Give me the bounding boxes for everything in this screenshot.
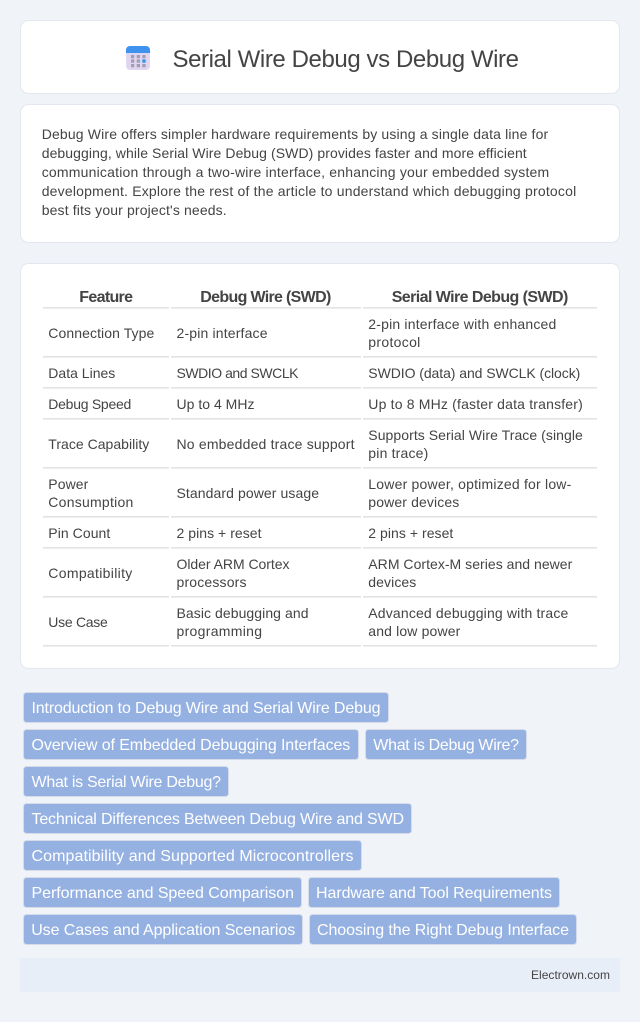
title card [20,20,620,94]
table header: Serial Wire Debug (SWD) [392,289,568,306]
intro text: best fits your project's needs. [42,202,227,218]
row: data lines [48,365,580,381]
row: connection type: Connection Type [48,325,155,341]
tag: introduction: Introduction to Debug Wire and Serial Wire Debug [32,700,380,717]
row: pin count: 2 pins + reset [176,525,262,541]
row: use case: Basic debugging and [176,605,308,621]
row: pin count: Pin Count [48,525,110,541]
tag: choosing [310,914,576,944]
tag: compatibility: Compatibility and Supported Microcontrollers [32,848,354,865]
row: data lines: Data Lines [48,365,115,381]
table header: Feature [79,289,133,306]
row: trace capability: No embedded trace support [176,436,355,452]
row: data lines: SWDIO (data) and SWCLK (clock) [368,365,580,381]
row: compatibility: devices [368,574,416,590]
comparison table card [20,264,620,668]
tag: hardware: Hardware and Tool Requirements [316,885,552,902]
row: power consumption: Standard power usage [176,485,319,501]
icon: calendar [126,46,150,70]
row: connection type: 2-pin interface with enhanced [368,316,556,332]
row: trace capability: Supports Serial Wire Trace (single [368,427,583,443]
tag: hardware [308,878,560,908]
tag: compatibility [24,840,362,870]
row: pin count: 2 pins + reset [368,525,453,541]
footer [20,958,620,992]
comparison table [43,289,597,647]
row: debug speed: Debug Speed [48,396,131,412]
table header: Debug Wire (SWD) [200,289,331,306]
row: trace capability [48,427,583,461]
intro card [20,104,620,242]
row: power consumption: Consumption [48,494,133,510]
row: power consumption: power devices [368,494,459,510]
row: use case: Use Case [48,614,108,630]
row: debug speed: Up to 4 MHz [176,396,254,412]
row: connection type: 2-pin interface [176,325,268,341]
tag: what is serial wire debug [24,766,228,796]
title: Serial Wire Debug vs Debug Wire [172,46,519,73]
row: connection type: protocol [368,334,420,350]
tag: introduction [24,692,388,722]
tag: choosing: Choosing the Right Debug Interface [317,922,569,939]
row: use case: and low power [368,623,461,639]
row: data lines: SWDIO and SWCLK [176,365,299,381]
tag: technical differences [24,804,412,834]
intro text: Debug Wire offers simpler hardware requirements by using a single data line for [42,126,549,142]
tag: use cases: Use Cases and Application Scenarios [31,922,295,939]
tag: performance: Performance and Speed Comparison [32,885,294,902]
row: debug speed: Up to 8 MHz (faster data transfer) [368,396,583,412]
row: trace capability: pin trace) [368,445,428,461]
row: use case [48,605,569,639]
row: connection type [48,316,556,350]
tag: what is serial wire debug: What is Serial Wire Debug? [32,774,221,791]
row: compatibility: processors [176,574,246,590]
row: compatibility: ARM Cortex-M series and newer [368,556,573,572]
intro text: development. Explore the rest of the article to understand which debugging protocol [42,183,576,199]
table header [79,289,568,306]
tag: performance [24,878,302,908]
footer credit: Electrown.com [531,968,610,982]
row: power consumption: Lower power, optimized for low- [368,476,572,492]
intro text: debugging, while Serial Wire Debug (SWD) provides faster and more efficient [42,145,527,161]
tag: overview [24,730,358,760]
tag: what is debug wire: What is Debug Wire? [373,737,519,754]
row: use case: programming [176,623,262,639]
row: compatibility: Compatibility [48,565,132,581]
tag: use cases [24,914,302,944]
row: power consumption [48,476,572,510]
row: power consumption: Power [48,476,89,492]
topic tags [24,692,576,944]
row: use case: Advanced debugging with trace [368,605,569,621]
row: compatibility: Older ARM Cortex [176,556,290,572]
row: compatibility [48,556,573,590]
row: trace capability: Trace Capability [48,436,149,452]
intro text: communication through a two-wire interface, enhancing your embedded system [42,164,549,180]
tag: overview: Overview of Embedded Debugging Interfaces [32,737,350,754]
tag: technical differences: Technical Differences Between Debug Wire and SWD [32,811,404,828]
row: pin count [48,525,453,541]
tag: what is debug wire [366,730,526,760]
row: debug speed [48,396,583,412]
intro text [42,126,576,218]
